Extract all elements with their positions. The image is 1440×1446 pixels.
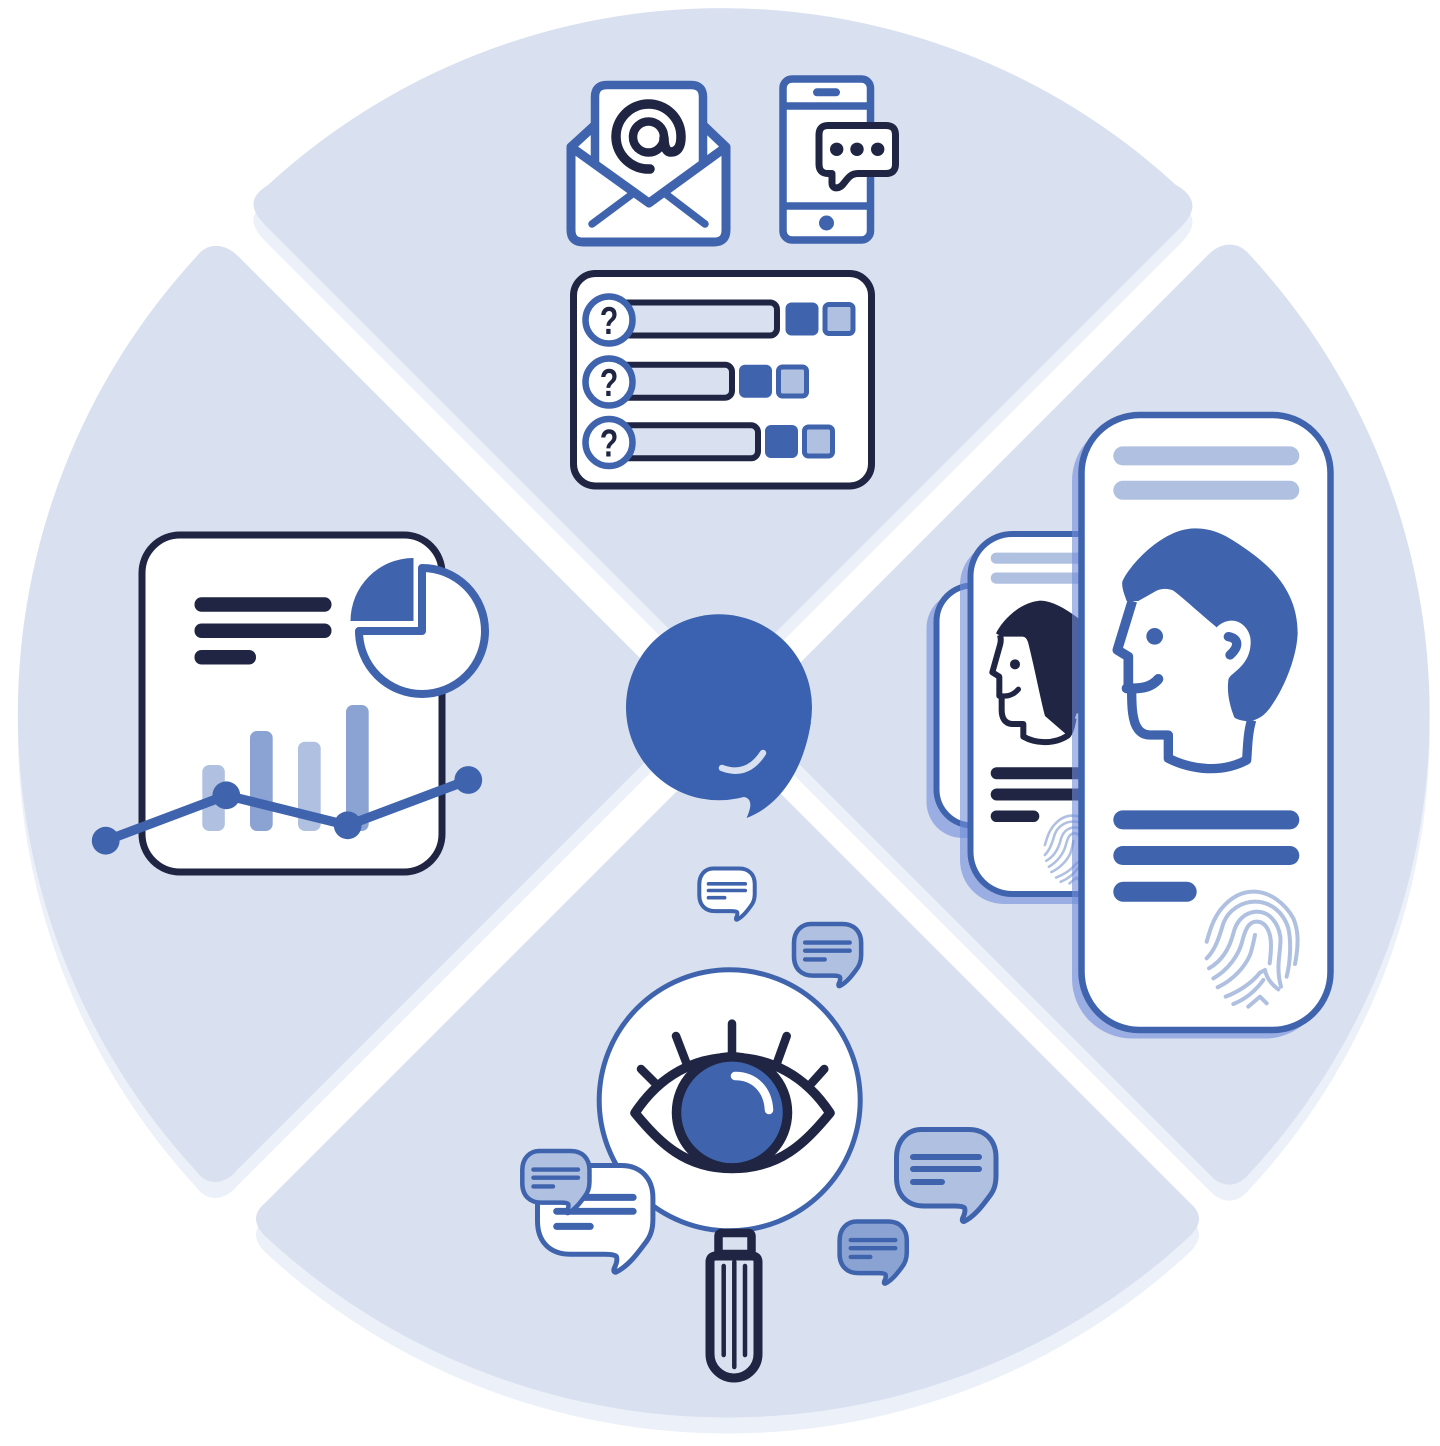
- panel: bottom sector: [256, 740, 1199, 1434]
- back card: [926, 582, 968, 838]
- bubble smile: [722, 753, 763, 771]
- middle card header lines: [990, 552, 1078, 584]
- middle card text lines: [990, 767, 1078, 822]
- pie chart: [350, 558, 485, 694]
- speech bubble: mid blue lower right: [840, 1222, 907, 1284]
- survey row 1: ?: [600, 299, 618, 343]
- panel: survey form: [574, 274, 872, 486]
- survey row 1: [586, 296, 853, 344]
- speech bubble: large white left: [538, 1166, 653, 1272]
- line chart: [92, 766, 482, 855]
- survey row 3: ?: [600, 422, 618, 465]
- speech bubble: large light right: [896, 1130, 996, 1222]
- survey row 2: ?: [600, 361, 618, 405]
- center speech bubble: [626, 614, 812, 818]
- middle card: [960, 531, 1078, 904]
- front card header lines: [1113, 446, 1299, 500]
- icon: at sign: [616, 104, 681, 169]
- icon: phone with chat bubble: [783, 79, 896, 240]
- speech bubble: light left: [522, 1151, 589, 1213]
- magnifier lens: [599, 970, 860, 1231]
- chat bubble: [819, 126, 896, 188]
- magnifier handle: [710, 1233, 758, 1378]
- panel: top sector: [253, 8, 1192, 700]
- icon: magnifying glass with eye: [599, 970, 860, 1378]
- speech bubble: small white top: [699, 868, 755, 920]
- icon: email envelope: [571, 85, 726, 242]
- panel: left sector: [18, 246, 695, 1198]
- small fingerprint: [1044, 814, 1078, 885]
- survey row 2: [586, 358, 806, 406]
- panel: analytics report: [92, 535, 485, 872]
- bar chart: [202, 705, 369, 831]
- large fingerprint: [1207, 892, 1298, 1007]
- eye: [635, 1024, 830, 1168]
- report text lines: [194, 597, 332, 664]
- front card text lines: [1113, 810, 1299, 902]
- portrait: dark hair: [992, 601, 1082, 742]
- portrait: blue hair: [1117, 528, 1298, 769]
- panel: identity cards: [926, 415, 1330, 1038]
- speech bubble: light upper right: [794, 924, 861, 986]
- panel: right sector: [749, 245, 1430, 1201]
- survey row 3: [586, 419, 832, 466]
- front card: [1072, 415, 1330, 1038]
- eyelashes: [641, 1024, 824, 1083]
